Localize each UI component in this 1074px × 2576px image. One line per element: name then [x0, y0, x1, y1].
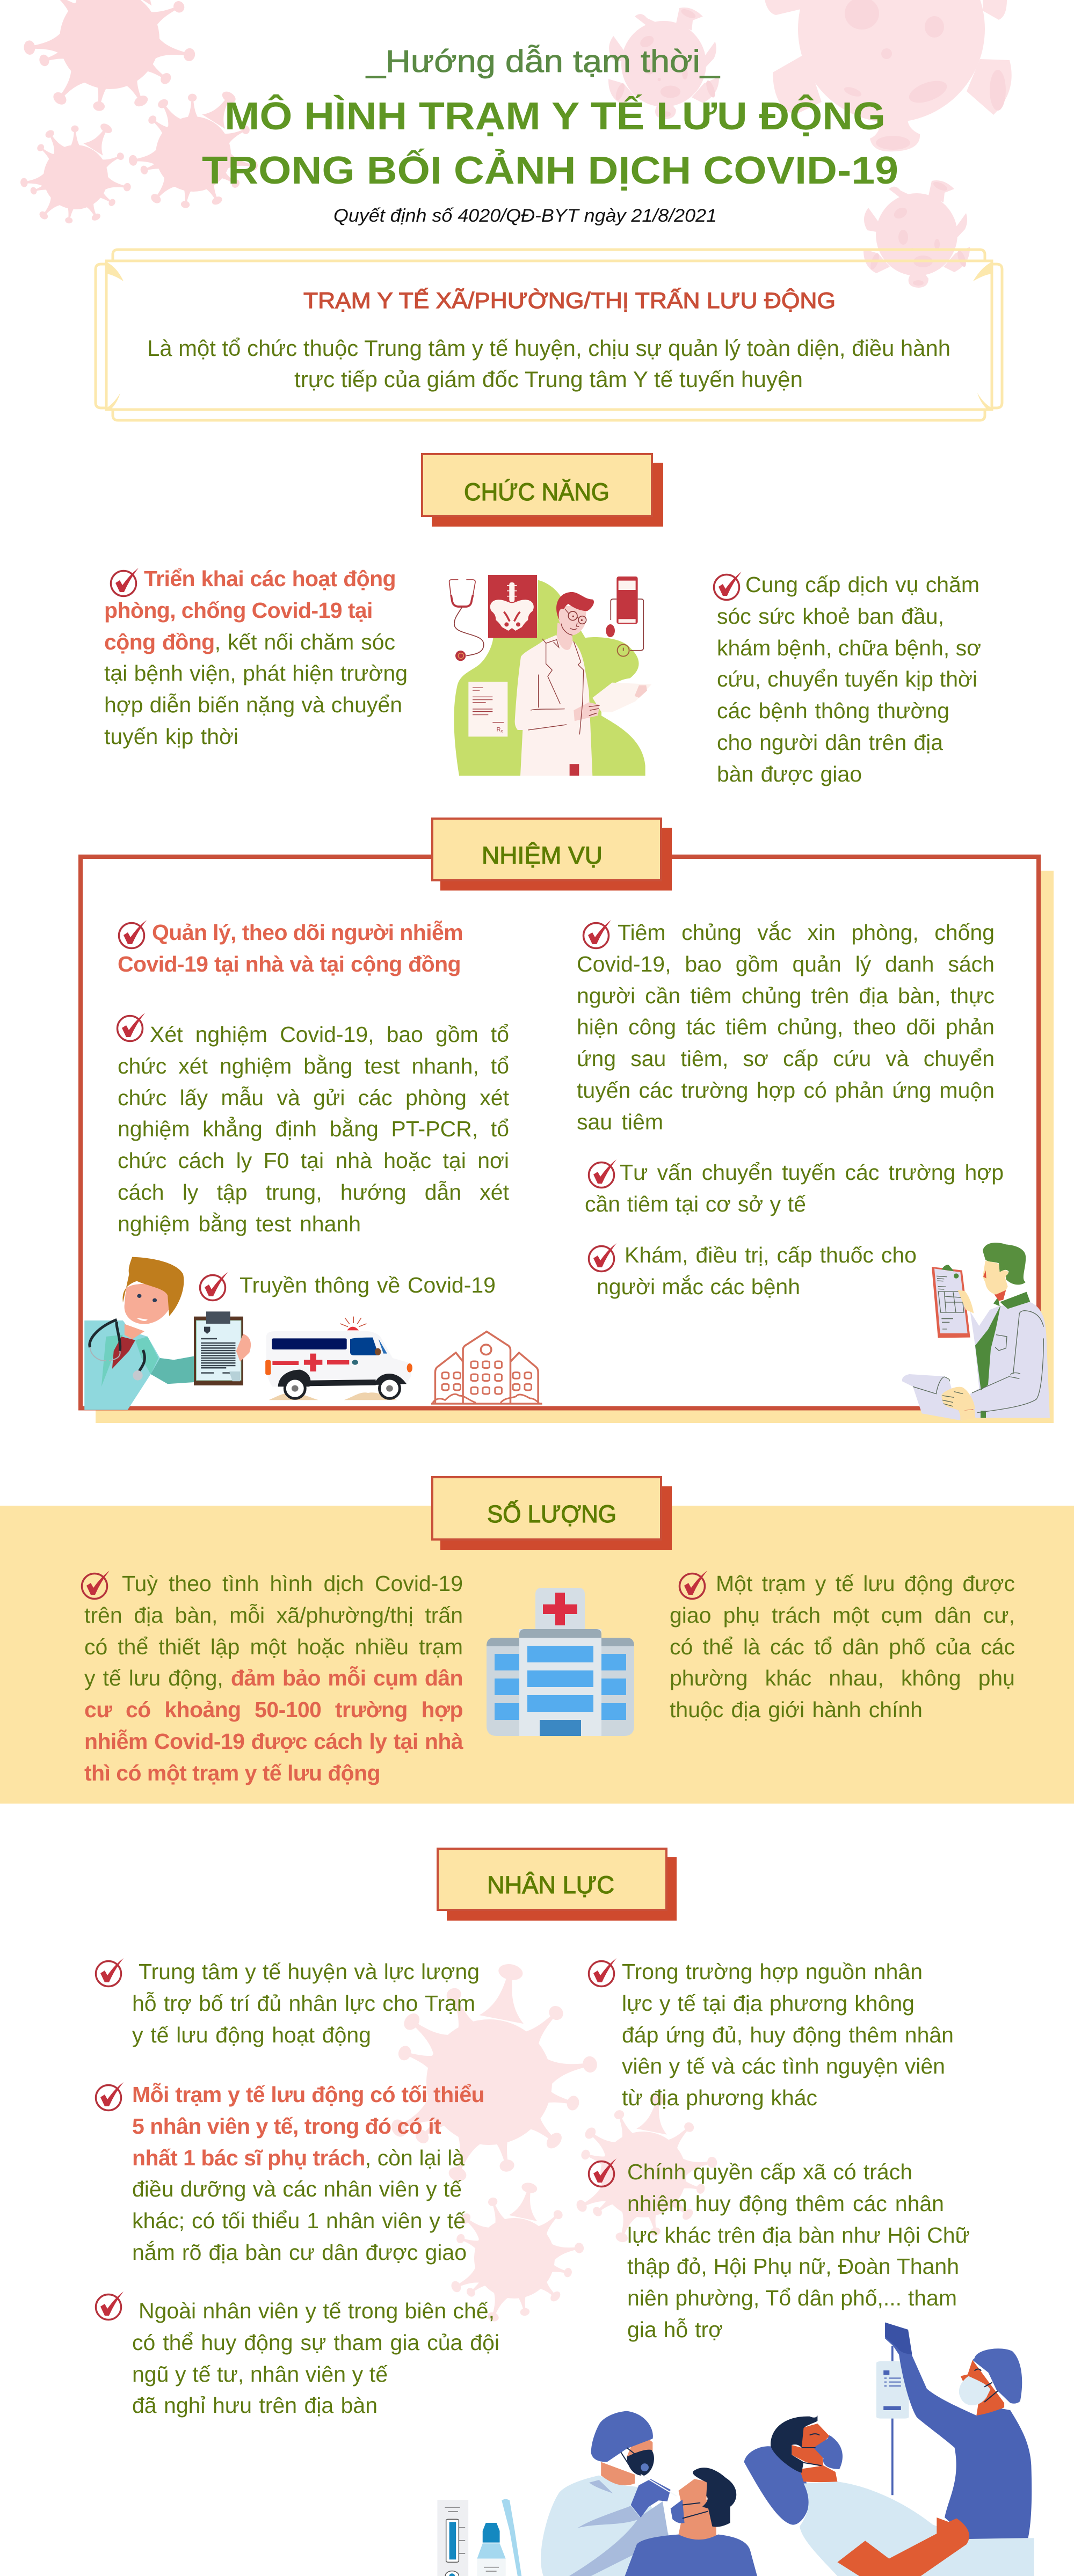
definition text: Là một tổ chức thuộc Trung tâm y tế huyện, chịu sự quản lý toàn diện, điều hành [147, 335, 950, 361]
subtitle: _Hướng dẫn tạm thời_ [366, 44, 720, 79]
title [202, 94, 898, 192]
text: số lượng left: trên địa bàn, mỗi xã/phường/thị trấn [84, 1603, 463, 1628]
text: chức năng left: cộng đồng, kết nối chăm sóc [104, 630, 395, 654]
panel: chức năng [104, 453, 981, 786]
icons: checks [117, 920, 616, 1300]
text: chính quyền cấp xã: gia hỗ trợ [627, 2317, 723, 2342]
text: mỗi trạm y tế: khác; có tối thiểu 1 nhân viên y tế [132, 2208, 466, 2233]
text: chức năng left: tại bệnh viện, phát hiện trường [104, 661, 408, 685]
definition text [147, 335, 950, 392]
text: xét nghiệm: nghiệm khẳng định bằng PT-PCR, tổ [118, 1116, 509, 1141]
panel: số lượng [0, 1476, 1074, 1804]
illustration: doctor with pelvis chart: x [500, 729, 503, 734]
text: trong trường hợp: đáp ứng đủ, huy động thêm nhân [622, 2023, 954, 2047]
definition text: trực tiếp của giám đốc Trung tâm Y tế tuyến huyện [294, 367, 803, 392]
text: chính quyền cấp xã: niên phường, Tổ dân phố,... tham [627, 2286, 957, 2310]
text: tiêm chủng: ứng sau tiêm, sơ cấp cứu và chuyển [577, 1046, 995, 1071]
text: chức năng right: sóc sức khoẻ ban đầu, [717, 604, 944, 629]
title: MÔ HÌNH TRẠM Y TẾ LƯU ĐỘNG [224, 94, 886, 138]
text: trong trường hợp: lực y tế tại địa phương không [622, 1991, 915, 2016]
text: mỗi trạm y tế: 5 nhân viên y tế, trong đó có ít [132, 2114, 441, 2139]
text: chức năng right: cho người dân trên địa [717, 730, 943, 755]
icon: check right [680, 1571, 707, 1599]
text: số lượng left: nhiễm Covid-19 được cách ly tại nhà [84, 1729, 463, 1754]
text: khám điều trị [597, 1243, 917, 1299]
text: trong trường hợp [622, 1959, 954, 2110]
text: xét nghiệm: nghiệm bằng test nhanh [118, 1212, 361, 1236]
text: trong trường hợp: Trong trường hợp nguồn nhân [622, 1959, 923, 1984]
text: ngoài nhân viên: có thể huy động sự tham gia của đội [132, 2330, 499, 2355]
illustration: hospital outline [431, 1332, 542, 1404]
panel: nhiệm vụ [78, 818, 1054, 1423]
icons: checks [96, 1958, 616, 2320]
text: số lượng right: Một trạm y tế lưu động được [716, 1571, 1015, 1596]
text: tiêm chủng: người cần tiêm chủng trên địa bàn, thực [577, 983, 995, 1008]
heading: nhân lực [438, 1849, 677, 1921]
text: trung tâm y tế [132, 1959, 480, 2047]
text: mỗi trạm y tế: Mỗi trạm y tế lưu động có tối thiểu [132, 2082, 484, 2107]
text: ngoài nhân viên [132, 2298, 499, 2418]
heading: nhiệm vụ [432, 819, 672, 891]
text: chính quyền cấp xã: thập đỏ, Hội Phụ nữ, Đoàn Thanh [627, 2254, 959, 2279]
text: chính quyền cấp xã: lực khác trên địa bàn như Hội Chữ [627, 2223, 970, 2247]
text: chức năng left: tuyến kịp thời [104, 724, 238, 749]
text: số lượng left: Tuỳ theo tình hình dịch Covid-19 [122, 1571, 463, 1596]
text: xét nghiệm: chức cách ly F0 tại nhà hoặc tại nơi [118, 1148, 509, 1173]
text: tư vấn: cần tiêm tại cơ sở y tế [585, 1192, 806, 1216]
heading: chức năng: CHỨC NĂNG [464, 478, 609, 506]
text: số lượng right: giao phụ trách một cụm dân cư, [670, 1603, 1015, 1628]
illustration: doctor reading chart [902, 1243, 1050, 1421]
frame heading: TRẠM Y TẾ XÃ/PHƯỜNG/THỊ TRẤN LƯU ĐỘNG [303, 288, 836, 313]
heading: chức năng [422, 454, 663, 527]
text: xét nghiệm: cách ly tập trung, hướng dẫn xét [118, 1180, 509, 1205]
heading: số lượng: SỐ LƯỢNG [487, 1500, 616, 1528]
text: chức năng right [717, 572, 981, 786]
illustration: patient on bed with IV [744, 2323, 1034, 2576]
text: số lượng left: cư có khoảng 50-100 trường hợp [84, 1697, 463, 1722]
text: tiêm chủng: Covid-19, bao gồm quản lý danh sách [577, 952, 995, 976]
illustration: doctor with clipboard [84, 1257, 251, 1410]
illustration: doctor with pelvis chart [449, 575, 651, 776]
icon: check left [82, 1571, 110, 1599]
icon: check right [714, 572, 742, 600]
text: ngoài nhân viên: ngũ y tế tư, nhân viên y tế [132, 2362, 388, 2387]
definition frame [96, 250, 1002, 420]
text: tư vấn [585, 1160, 1004, 1216]
text: tiêm chủng: sau tiêm [577, 1110, 663, 1134]
decision reference: Quyết định số 4020/QĐ-BYT ngày 21/8/2021 [333, 206, 717, 226]
text: khám điều trị: người mắc các bệnh [597, 1274, 800, 1299]
heading: nhân lực: NHÂN LỰC [487, 1871, 614, 1899]
text: tiêm chủng: Tiêm chủng vắc xin phòng, chống [618, 920, 995, 945]
text: chính quyền cấp xã [627, 2159, 970, 2342]
text: xét nghiệm: Xét nghiệm Covid-19, bao gồm tổ [150, 1022, 509, 1047]
text: chức năng left: phòng, chống Covid-19 tại [104, 598, 373, 623]
panel: nhân lực [95, 1848, 1034, 2576]
illustration: doctor with pelvis chart: R [497, 727, 500, 733]
illustration: test kit [437, 2499, 521, 2576]
text: xét nghiệm: chức xét nghiệm bằng test nhanh, tổ [118, 1054, 509, 1078]
icon: hospital building [487, 1588, 634, 1736]
text: chính quyền cấp xã: nhiệm huy động thêm các nhân [627, 2191, 944, 2216]
panel: header [20, 0, 1012, 422]
text: tiêm chủng: hiện công tác tiêm chủng, theo dõi phản [577, 1015, 995, 1039]
text: xét nghiệm [118, 1022, 509, 1236]
text: ngoài nhân viên: đã nghỉ hưu trên địa bàn [132, 2393, 378, 2418]
text: chức năng right: khám bệnh, chữa bệnh, sơ [717, 636, 981, 660]
background viruses [19, 0, 1012, 288]
text: trung tâm y tế: y tế lưu động hoạt động [132, 2023, 371, 2047]
icon: check left [111, 568, 139, 596]
text: mỗi trạm y tế: nhất 1 bác sĩ phụ trách, còn lại là [132, 2146, 465, 2170]
illustration: ambulance [265, 1317, 412, 1400]
text: mỗi trạm y tế: nắm rõ địa bàn cư dân được giao [132, 2240, 467, 2265]
text: chức năng left: Triển khai các hoạt động [144, 566, 396, 591]
text: tiêm chủng: tuyến các trường hợp có phản ứng muộn [577, 1078, 995, 1103]
text: trong trường hợp: từ địa phương khác [622, 2085, 817, 2110]
text: số lượng left: thì có một trạm y tế lưu động [84, 1761, 380, 1785]
text: số lượng left: y tế lưu động, đảm bảo mỗi cụm dân [84, 1666, 463, 1690]
text: số lượng left [84, 1571, 463, 1785]
text: tiêm chủng [577, 920, 995, 1134]
text: chức năng right: các bệnh thông thường [717, 698, 949, 723]
text: trung tâm y tế: Trung tâm y tế huyện và lực lượng [139, 1959, 480, 1984]
text: quản lý [118, 920, 463, 976]
text: số lượng left: có thể thiết lập một hoặc nhiều trạm [84, 1634, 463, 1659]
text: quản lý: Covid-19 tại nhà và tại cộng đồng [118, 952, 461, 976]
text: số lượng right: có thể là các tổ dân phố của các [670, 1634, 1015, 1659]
text: truyền thông: Truyền thông về Covid-19 [240, 1273, 496, 1297]
text: số lượng right: phường khác nhau, không phụ [670, 1666, 1015, 1690]
text: trung tâm y tế: hỗ trợ bố trí đủ nhân lực cho Trạm [132, 1991, 475, 2016]
text: chính quyền cấp xã: Chính quyền cấp xã có trách [627, 2159, 912, 2184]
background viruses [346, 1937, 736, 2338]
text: xét nghiệm: chức lấy mẫu và gửi các phòng xét [118, 1085, 509, 1110]
frame: red border [81, 857, 1039, 1409]
text: quản lý: Quản lý, theo dõi người nhiễm [152, 920, 463, 945]
text: trong trường hợp: viên y tế và các tình nguyện viên [622, 2054, 945, 2078]
frame: yellow offset [96, 871, 1054, 1423]
title: TRONG BỐI CẢNH DỊCH COVID-19 [202, 148, 898, 192]
text: số lượng right: thuộc địa giới hành chính [670, 1697, 923, 1722]
text: khám điều trị: Khám, điều trị, cấp thuốc cho [625, 1243, 917, 1267]
text: chức năng right: cứu, chuyển tuyến kịp thời [717, 667, 977, 691]
text: ngoài nhân viên: Ngoài nhân viên y tế trong biên chế, [139, 2298, 495, 2323]
text: tư vấn: Tư vấn chuyển tuyến các trường hợp [620, 1160, 1004, 1185]
text: chức năng left: hợp diễn biến nặng và chuyển [104, 692, 402, 717]
heading: số lượng [432, 1477, 672, 1550]
text: số lượng right [670, 1571, 1015, 1722]
illustration: nurse swabbing patient [541, 2411, 757, 2576]
text: chức năng left [104, 566, 408, 749]
text: chức năng right: bàn được giao [717, 762, 862, 786]
text: mỗi trạm y tế [132, 2082, 484, 2265]
heading: nhiệm vụ: NHIỆM VỤ [482, 842, 603, 869]
text: chức năng right: Cung cấp dịch vụ chăm [745, 572, 979, 597]
text: mỗi trạm y tế: điều dưỡng và các nhân viên y tế [132, 2177, 462, 2201]
yellow band [0, 1506, 1074, 1804]
